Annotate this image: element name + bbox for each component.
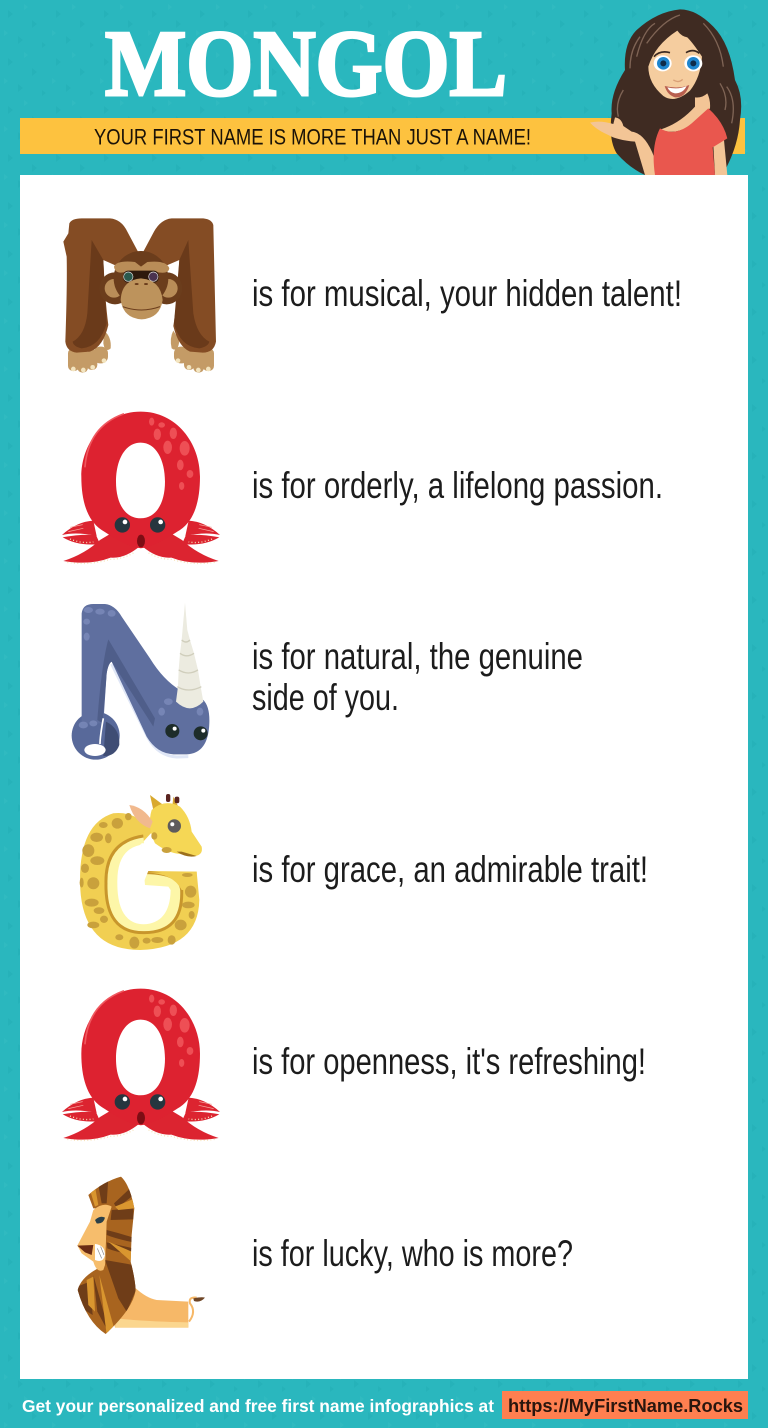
icon: lion L bbox=[73, 1172, 205, 1338]
icon: octopus O bbox=[62, 412, 220, 563]
icon: cartoon woman bbox=[590, 9, 741, 175]
icon: narwhal N bbox=[72, 603, 209, 760]
footer link: https://MyFirstName.Rocks bbox=[508, 1396, 743, 1416]
row 1: letter M monkey bbox=[63, 218, 682, 373]
tagline banner bbox=[20, 118, 745, 154]
row 2: letter O octopus bbox=[62, 412, 663, 563]
title: MONGOL bbox=[105, 12, 507, 116]
footer link bbox=[502, 1391, 748, 1419]
row 3: letter N narwhal bbox=[72, 603, 583, 760]
icon: giraffe G bbox=[80, 794, 207, 950]
text: N bbox=[252, 636, 583, 718]
footer call to action: Get your personalized and free first name infographics at bbox=[22, 1396, 494, 1416]
text: G: is for grace, an admirable trait! bbox=[252, 849, 648, 890]
shirt bbox=[654, 108, 727, 175]
text: N: is for natural, the genuine bbox=[252, 636, 583, 677]
text: O second: is for openness, it's refreshing! bbox=[252, 1041, 646, 1082]
icon: monkey M bbox=[63, 218, 216, 373]
text: O: is for orderly, a lifelong passion. bbox=[252, 465, 663, 506]
row 6: letter L lion bbox=[73, 1172, 573, 1338]
tagline banner: YOUR FIRST NAME IS MORE THAN JUST A NAME! bbox=[94, 124, 531, 150]
icon: octopus O second bbox=[62, 989, 220, 1140]
neck and arm bbox=[661, 93, 710, 132]
footer bbox=[22, 1391, 748, 1419]
text: N: side of you. bbox=[252, 677, 399, 718]
row 4: letter G giraffe bbox=[80, 794, 648, 950]
main white panel bbox=[20, 175, 748, 1379]
text: L: is for lucky, who is more? bbox=[252, 1233, 573, 1274]
face bbox=[648, 31, 702, 99]
row 5: letter O octopus bbox=[62, 989, 646, 1140]
